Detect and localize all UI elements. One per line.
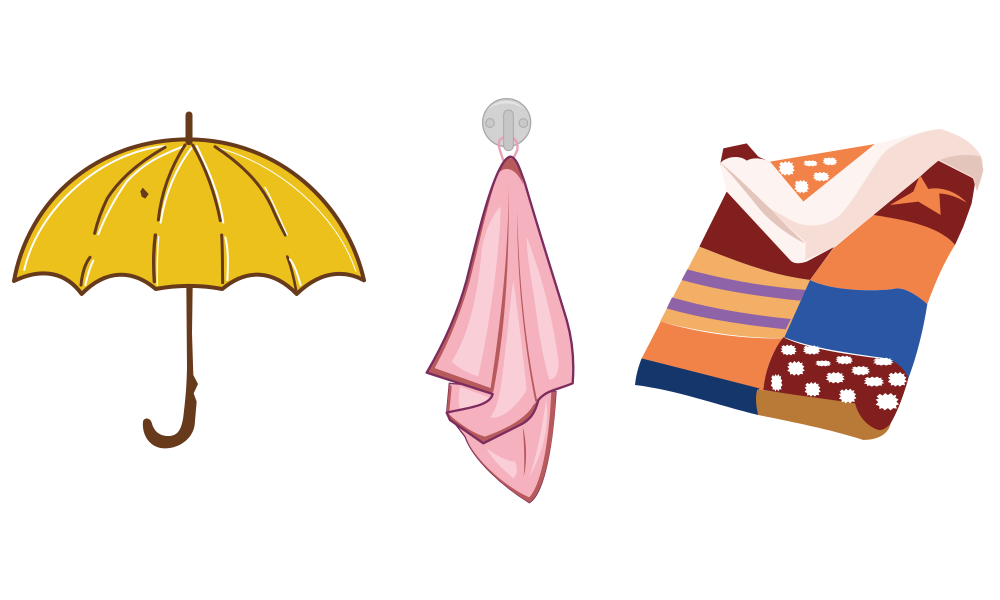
blanket folded edge bbox=[720, 129, 983, 263]
blanket patch: tan-brown corner bbox=[756, 389, 891, 440]
blanket patch: right orange bbox=[810, 215, 955, 304]
blanket patch: blue bbox=[784, 280, 927, 378]
icon: towel on hook bbox=[427, 99, 573, 503]
blanket patch: top maroon corner bbox=[720, 143, 773, 165]
wall hook bbox=[483, 99, 531, 161]
umbrella handle bbox=[143, 287, 198, 448]
blanket patch: maroon with star bbox=[873, 160, 975, 245]
towel front fold bbox=[427, 157, 573, 443]
towel back layer bbox=[447, 383, 556, 503]
umbrella ferrule bbox=[178, 115, 199, 142]
blanket patch: lower orange bbox=[642, 322, 783, 391]
icon: folded patchwork blanket bbox=[635, 129, 983, 440]
blanket patch: top orange with dots bbox=[770, 144, 875, 202]
umbrella canopy bbox=[14, 139, 364, 294]
umbrella notch bbox=[140, 188, 149, 199]
umbrella ribs bbox=[81, 145, 301, 290]
blanket patch: maroon with dots bbox=[763, 337, 908, 430]
blanket patch: tan and purple stripes bbox=[660, 247, 810, 338]
icon: umbrella bbox=[14, 115, 364, 448]
blanket patch: navy bbox=[635, 358, 759, 415]
towel highlights bbox=[452, 207, 558, 418]
towel edge shading bbox=[427, 157, 538, 443]
towel outline bbox=[427, 157, 573, 443]
blanket patch: upper maroon bbox=[699, 192, 837, 280]
